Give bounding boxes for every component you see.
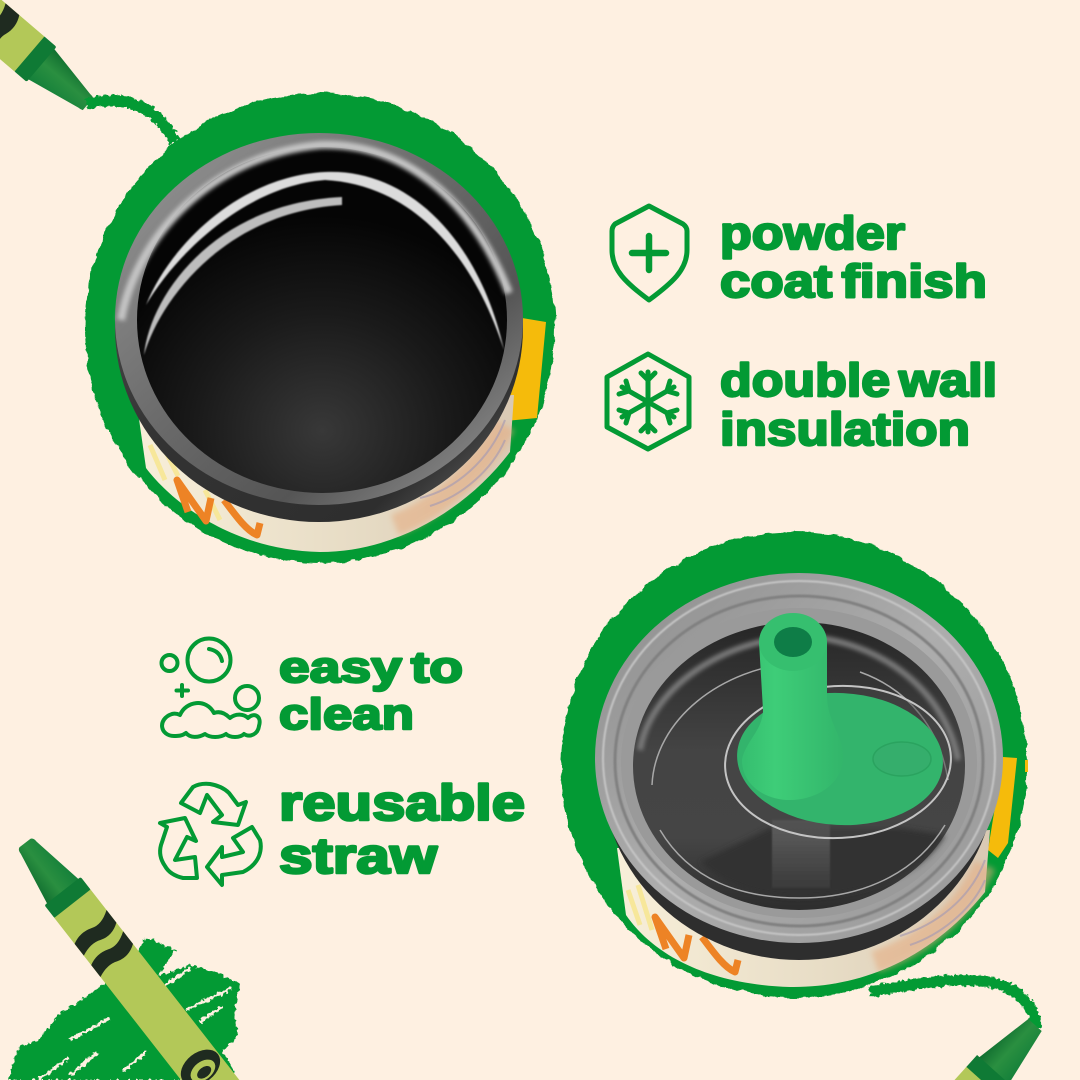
lid ring lines (603, 581, 995, 935)
crayon logo (174, 1042, 227, 1080)
crayon bands (70, 910, 120, 956)
heading: powder coat finish: powder (720, 207, 905, 259)
yellow fleck (1025, 760, 1028, 772)
feature: double wall insulation (607, 354, 997, 455)
crayon top left (0, 0, 103, 121)
submerged straw (772, 820, 830, 888)
lid inner ring (621, 608, 977, 918)
yellow crayon marks (628, 885, 652, 930)
cup interior (137, 147, 507, 493)
green straw (742, 613, 843, 800)
panel: open cup (115, 133, 546, 552)
cup wrap (137, 395, 514, 552)
heading: easy to clean: easy to (279, 643, 463, 692)
green disc (734, 688, 946, 830)
top rim highlight (121, 145, 509, 320)
heading: reusable straw: reusable (279, 775, 525, 831)
feature: easy to clean (162, 638, 463, 739)
crayon trail bottom right (870, 980, 1036, 1028)
crayon bottom right (940, 1010, 1052, 1080)
icon: recycle arrows (160, 784, 261, 885)
icon: soap bubbles (162, 638, 260, 737)
straw top (759, 613, 827, 671)
heading: easy to clean: clean (279, 690, 414, 739)
yellow crayon marks (150, 440, 220, 520)
feature: powder coat finish (612, 206, 987, 307)
orange and lilac crayon texture (395, 425, 505, 525)
lower floor shadow (700, 828, 945, 897)
lid outer ring (595, 573, 1003, 943)
lid well (633, 622, 965, 910)
feature: reusable straw (160, 775, 525, 885)
inner ridge (652, 662, 948, 898)
heading: double wall insulation: double wall (720, 354, 997, 406)
lower shelf highlight (144, 197, 342, 355)
dark rim band (602, 584, 996, 960)
panel: green blob behind lid cup (561, 532, 1027, 998)
disc vent (873, 742, 931, 776)
icon: shield (612, 206, 687, 300)
yellow label tab (506, 318, 546, 421)
straw tube and flared base (742, 642, 843, 800)
crayon trail top left (86, 101, 175, 142)
heading: powder coat finish: coat finish (720, 255, 987, 307)
inner shelf highlight (146, 172, 504, 350)
heading: double wall insulation: insulation (720, 403, 970, 455)
orange and lilac crayon texture (875, 865, 985, 962)
orange squiggle (177, 480, 260, 535)
crayon bottom left (7, 829, 244, 1080)
crayon scribble bottom left (8, 937, 240, 1080)
yellow label tab (988, 757, 1017, 858)
disc seat ring (721, 680, 955, 844)
cup wrap (617, 830, 990, 987)
orange squiggle (655, 917, 738, 972)
straw opening (774, 627, 812, 657)
icon: snowflake hexagon (607, 354, 689, 449)
metal rim (115, 134, 523, 522)
heading: reusable straw: straw (279, 828, 437, 884)
panel: lidded cup (595, 573, 1028, 987)
panel: green blob behind open cup (85, 93, 555, 563)
metal lip (115, 133, 523, 505)
